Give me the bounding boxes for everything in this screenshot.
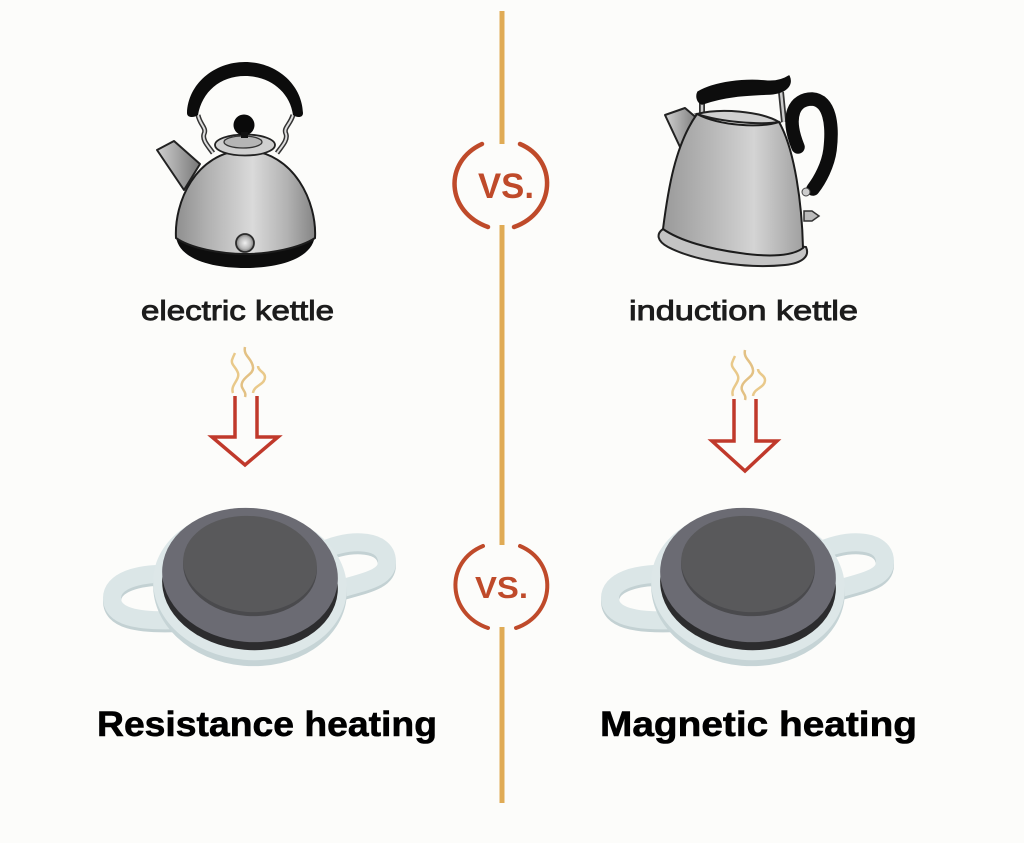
badge: top vs.: VS. <box>478 167 534 206</box>
grey ring <box>654 501 842 649</box>
icon: electric kettle <box>157 62 315 268</box>
heading: Resistance heating: Resistance heating <box>97 705 437 744</box>
center divider line <box>500 11 504 803</box>
base plate <box>147 504 353 674</box>
lid <box>215 134 275 156</box>
black underside <box>655 513 841 657</box>
left ring shadow <box>610 577 678 623</box>
kettle body <box>176 150 315 254</box>
right ring shadow <box>818 545 885 595</box>
handle wires <box>198 115 293 153</box>
base plate <box>645 504 851 674</box>
base <box>659 229 807 266</box>
badge: top vs. <box>455 144 547 227</box>
label: induction kettle: induction kettle <box>629 295 858 326</box>
grey ring <box>156 501 344 649</box>
switch <box>804 211 819 221</box>
kettle body <box>663 114 803 255</box>
right ring <box>320 542 387 592</box>
top disc edge <box>179 512 321 622</box>
right ring shadow <box>320 545 387 595</box>
spout <box>157 141 200 190</box>
heading: Magnetic heating: Magnetic heating <box>600 705 917 744</box>
lower connector <box>802 188 810 196</box>
icon: heating plate, left <box>112 501 387 674</box>
lid <box>697 111 779 123</box>
top handle <box>697 76 790 104</box>
side handle <box>792 99 831 189</box>
icon: induction kettle <box>659 76 831 266</box>
black top handle <box>187 62 303 117</box>
black base <box>176 232 315 268</box>
label: electric kettle: electric kettle <box>141 295 334 326</box>
knob <box>234 114 254 136</box>
top disc <box>677 510 819 618</box>
icon: heating plate, right <box>610 501 885 674</box>
right ring <box>818 542 885 592</box>
badge: bottom vs.: VS. <box>475 570 528 605</box>
left ring shadow <box>112 577 180 623</box>
top disc <box>179 510 321 618</box>
icon: steam and heat arrow, right <box>712 350 777 471</box>
posts <box>702 92 784 122</box>
top disc edge <box>677 512 819 622</box>
black underside <box>157 513 343 657</box>
icon: steam and heat arrow, left <box>212 347 278 465</box>
spout <box>665 108 699 147</box>
power button <box>236 234 254 252</box>
badge: bottom vs. <box>455 546 547 628</box>
left ring <box>112 574 180 620</box>
left ring <box>610 574 678 620</box>
